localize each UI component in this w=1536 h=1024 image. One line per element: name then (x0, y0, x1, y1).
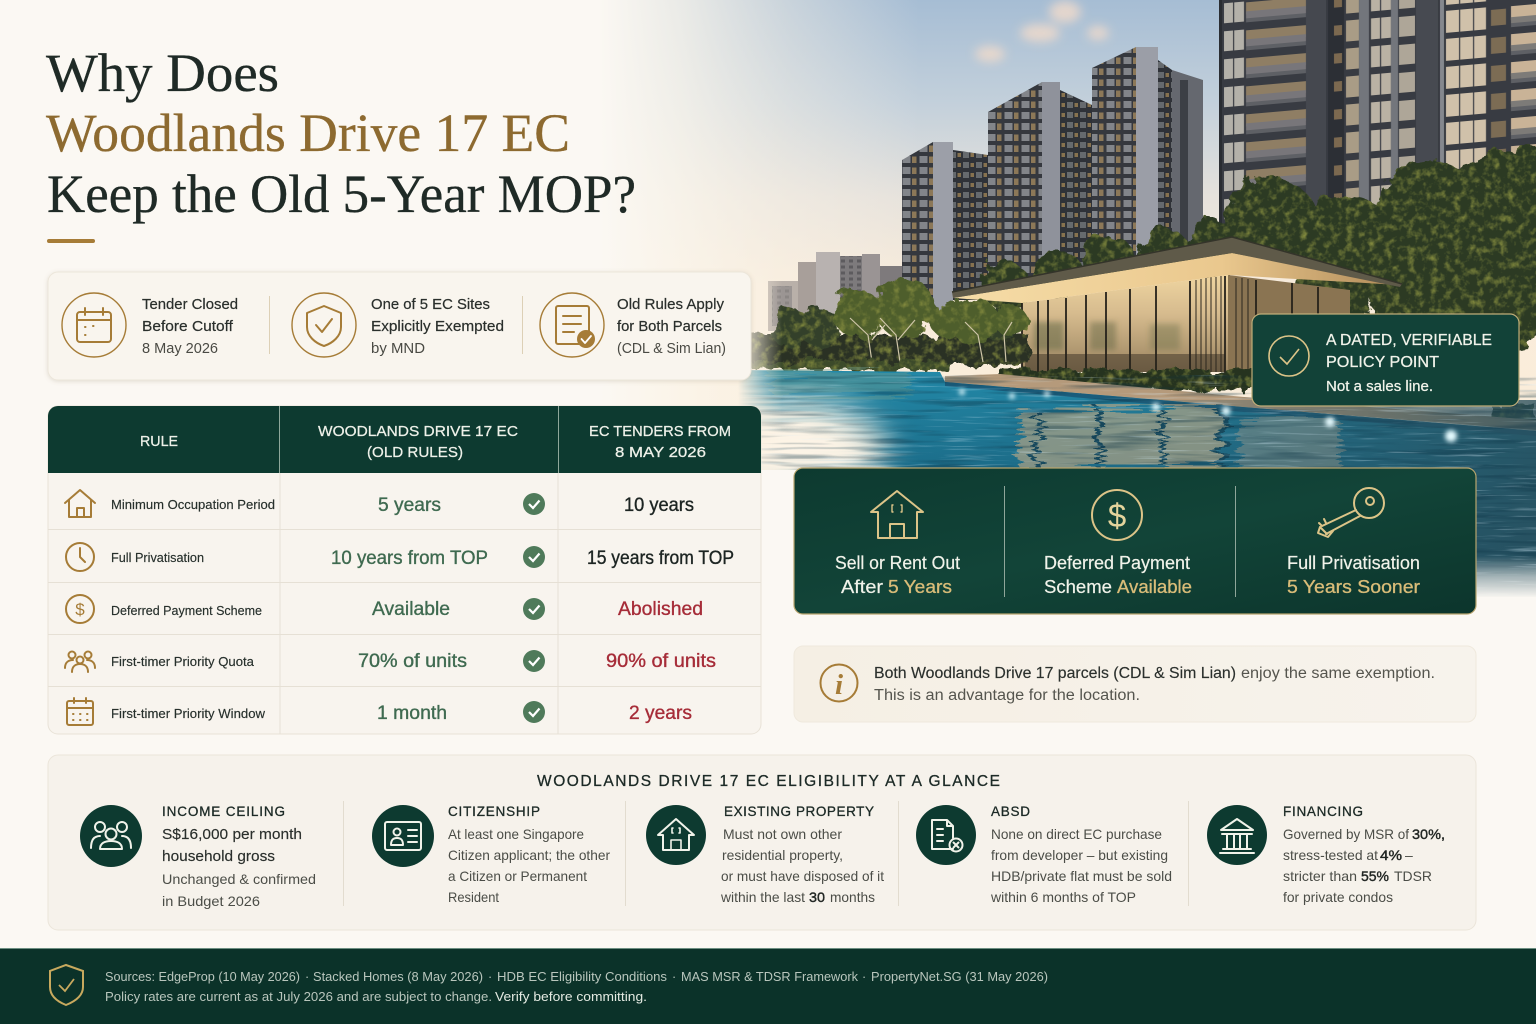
item: existing property: residential property, (722, 847, 843, 863)
pool (655, 370, 1536, 600)
title accent rule (47, 239, 95, 243)
twin tower right (1092, 47, 1203, 265)
item: financing: – (1405, 847, 1413, 863)
sources: MAS MSR & TDSR Framework (681, 970, 859, 984)
item: absd (916, 804, 1172, 905)
table header: WOODLANDS DRIVE 17 EC (318, 424, 518, 440)
item: income ceiling: in Budget 2026 (162, 893, 260, 909)
icon: shield (292, 293, 356, 357)
row: deferred payment scheme: Abolished (618, 599, 703, 620)
text: sell or rent: After (841, 577, 883, 597)
text: full privatisation: Full Privatisation (1287, 553, 1420, 573)
item: citizenship (372, 804, 610, 905)
panel: key facts (48, 272, 751, 380)
back foliage (981, 145, 1536, 350)
text: exemption note: Both Woodlands Drive 17 parcels (CDL & Sim Lian) (874, 665, 1236, 682)
item: absd: from developer – but existing (991, 847, 1168, 863)
panel: exemption note (794, 646, 1476, 722)
callout: dated verifiable policy point: POLICY POINT (1326, 354, 1440, 371)
comparison table (48, 406, 761, 734)
title (46, 43, 636, 224)
large tower (1219, 0, 1536, 250)
callout: dated verifiable policy point (1252, 314, 1519, 406)
text: old rules (617, 297, 726, 357)
callout: dated verifiable policy point: A DATED, VERIFIABLE (1326, 332, 1492, 349)
row: first-timer priority quota: 90% of units (606, 651, 716, 672)
table header: RULE (140, 434, 178, 450)
icon: document (540, 293, 604, 357)
row: deferred payment scheme: Available (372, 599, 450, 620)
text: tender closed (142, 297, 238, 357)
row: first-timer priority quota (65, 650, 716, 672)
sources: · (305, 970, 309, 984)
text: one of five sites: by MND (371, 341, 425, 357)
text: exemption note: enjoy the same exemption. (1241, 665, 1435, 682)
policy disclaimer: Policy rates are current as at July 2026 and are subject to change. (105, 990, 492, 1004)
row: first-timer priority quota: 70% of units (358, 651, 467, 672)
text: deferred payment: Deferred Payment (1044, 553, 1190, 573)
text: old rules: for Both Parcels (617, 319, 722, 335)
item: citizenship: CITIZENSHIP (448, 804, 540, 819)
item: existing property: within the last (720, 889, 805, 905)
far towers (768, 252, 902, 331)
left foreground masked toward the copy column (740, 252, 1536, 596)
item: existing property: months (830, 889, 875, 905)
policy disclaimer (105, 990, 647, 1004)
item: existing property: Must not own other (723, 826, 842, 842)
sources: · (672, 970, 676, 984)
text: sell or rent: Sell or Rent Out (835, 553, 960, 573)
small tower (902, 142, 988, 312)
item: income ceiling: Unchanged & confirmed (162, 871, 316, 887)
item: financing: FINANCING (1283, 804, 1363, 819)
row: first-timer priority window: First-timer Priority Window (111, 707, 266, 721)
row: minimum occupation period (65, 490, 694, 517)
text: sell or rent: 5 Years (888, 577, 952, 597)
text: tender closed: Tender Closed (142, 297, 238, 313)
item: financing: stricter than (1283, 868, 1357, 884)
row: minimum occupation period: 10 years (624, 495, 694, 516)
icon: calendar (62, 293, 126, 357)
photo fades (730, 470, 1536, 642)
row: full privatisation: 10 years from TOP (331, 548, 488, 569)
row: first-timer priority quota: First-timer Priority Quota (111, 655, 254, 669)
table header: 8 MAY 2026 (615, 445, 706, 461)
item: income ceiling: S$16,000 per month (162, 826, 302, 843)
clubhouse roof (952, 237, 1402, 303)
clubhouse glass (1022, 275, 1350, 378)
panel: benefits (794, 468, 1476, 614)
icon: info: i (835, 669, 843, 701)
table header (140, 424, 731, 461)
item: existing property: 30 (809, 889, 825, 905)
icon: dollar: $ (1108, 497, 1126, 534)
garden and deck (745, 362, 1536, 430)
icon: dollar (1092, 490, 1142, 540)
row: first-timer priority window (67, 698, 692, 725)
text: exemption note (874, 665, 1435, 704)
row: full privatisation (66, 543, 734, 571)
row: full privatisation: 15 years from TOP (587, 548, 734, 569)
panel: eligibility at a glance (48, 755, 1476, 930)
text: one of five sites: Explicitly Exempted (371, 319, 504, 335)
item: existing property: or must have disposed of it (721, 868, 884, 884)
item: financing (1207, 804, 1445, 905)
left garden trees (745, 278, 1030, 365)
title: Keep the Old 5-Year MOP? (47, 164, 636, 224)
text: one of five sites (371, 297, 504, 357)
text: sell or rent (835, 553, 960, 597)
title: Woodlands Drive 17 EC (46, 103, 570, 163)
sources: · (862, 970, 866, 984)
text: tender closed: Before Cutoff (142, 319, 234, 335)
sources: Sources: EdgeProp (10 May 2026) (105, 970, 300, 984)
item: financing: stress-tested at (1283, 847, 1378, 863)
item: income ceiling (80, 804, 316, 909)
row: minimum occupation period: 5 years (378, 495, 441, 516)
policy disclaimer: Verify before committing. (495, 990, 647, 1004)
item: financing: TDSR (1394, 868, 1432, 884)
item: existing property (646, 804, 884, 905)
item: absd: HDB/private flat must be sold (991, 868, 1172, 884)
icon: footer shield (50, 965, 83, 1005)
icon: house (871, 491, 923, 538)
item: financing: for private condos (1283, 889, 1393, 905)
item: financing: 55% (1361, 868, 1389, 884)
row: deferred payment scheme: Deferred Payment Scheme (111, 604, 262, 618)
sources: · (488, 970, 492, 984)
sources: PropertyNet.SG (31 May 2026) (871, 970, 1048, 984)
sources (105, 970, 1048, 984)
item: absd: within 6 months of TOP (990, 889, 1136, 905)
row: first-timer priority window: 2 years (629, 703, 692, 724)
text: exemption note: This is an advantage for the location. (874, 687, 1140, 704)
icon: info (820, 664, 858, 702)
eligibility heading: WOODLANDS DRIVE 17 EC ELIGIBILITY AT A GLANCE (537, 773, 1000, 790)
item: financing: Governed by MSR of (1283, 826, 1409, 842)
item: financing: 30%, (1412, 826, 1445, 842)
item: absd: None on direct EC purchase (991, 826, 1162, 842)
text: deferred payment: Scheme (1044, 577, 1112, 597)
table header: EC TENDERS FROM (589, 424, 731, 440)
item: citizenship: a Citizen or Permanent (448, 868, 587, 884)
text: old rules: (CDL & Sim Lian) (617, 341, 726, 357)
item: income ceiling: household gross (162, 848, 275, 865)
text: deferred payment (1044, 553, 1192, 597)
text: full privatisation: 5 Years Sooner (1287, 577, 1420, 597)
table header: (OLD RULES) (367, 445, 463, 461)
sources: HDB EC Eligibility Conditions (497, 970, 667, 984)
title: Why Does (46, 43, 279, 103)
text: tender closed: 8 May 2026 (142, 341, 218, 357)
twin tower left (988, 82, 1092, 290)
row: full privatisation: Full Privatisation (111, 551, 204, 565)
text: full privatisation (1287, 553, 1420, 597)
icon: key (1318, 488, 1384, 537)
row: deferred payment scheme (66, 595, 703, 623)
row: first-timer priority window: 1 month (377, 703, 447, 724)
text: one of five sites: One of 5 EC Sites (371, 297, 490, 313)
item: citizenship: At least one Singapore (448, 826, 584, 842)
item: financing: 4% (1380, 847, 1402, 863)
text: old rules: Old Rules Apply (617, 297, 725, 313)
item: citizenship: Resident (448, 889, 499, 905)
row: deferred payment scheme: $ (75, 600, 85, 619)
sources: Stacked Homes (8 May 2026) (313, 970, 483, 984)
item: absd: ABSD (991, 804, 1030, 819)
text: deferred payment: Available (1117, 577, 1192, 597)
row: minimum occupation period: Minimum Occupation Period (111, 498, 275, 512)
item: income ceiling: INCOME CEILING (162, 804, 285, 819)
callout: dated verifiable policy point: Not a sales line. (1326, 379, 1433, 395)
item: existing property: EXISTING PROPERTY (724, 804, 874, 819)
footer (0, 948, 1536, 1024)
item: citizenship: Citizen applicant; the other (448, 847, 610, 863)
hero photo illustration: condominium towers, clubhouse and pool (600, 0, 1536, 642)
